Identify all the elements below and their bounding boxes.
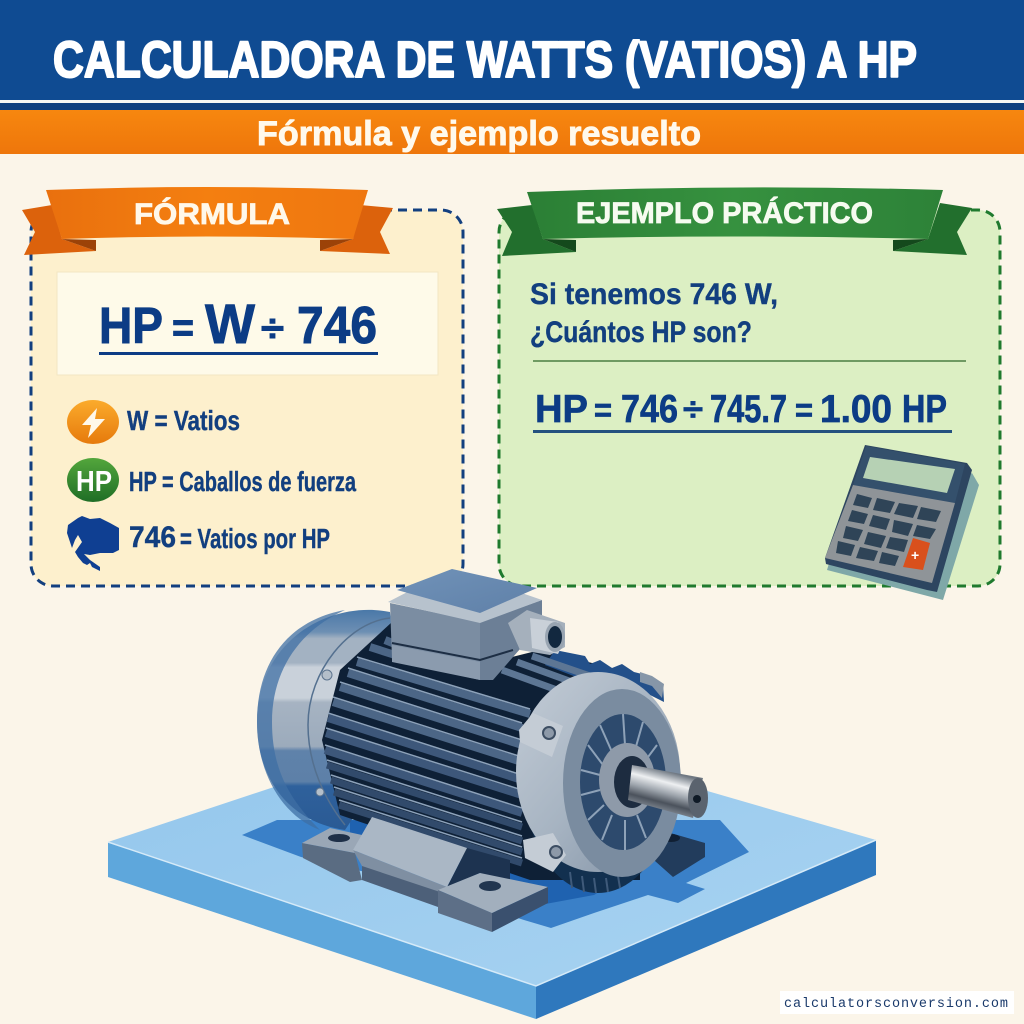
formula text: = <box>172 306 194 350</box>
calculation: = <box>795 392 813 428</box>
finned body <box>322 622 664 880</box>
calculation <box>533 388 952 433</box>
panel: worked example <box>497 187 1000 600</box>
calculation: = <box>594 392 612 428</box>
watermark <box>780 991 1014 1014</box>
ribbon: example heading <box>497 187 972 256</box>
cable gland <box>508 610 565 655</box>
label: HP: HP = Caballos de fuerza <box>129 466 356 497</box>
rear foot right <box>646 832 705 877</box>
label: 746: = Vatios por HP <box>180 523 330 554</box>
formula text: ÷ <box>261 308 284 350</box>
question text: ¿Cuántos HP son? <box>530 316 752 349</box>
formula text: W <box>205 292 255 355</box>
calculation: HP <box>535 388 588 431</box>
icon: HP badge: HP <box>76 466 112 498</box>
mounting ears <box>519 713 566 872</box>
terminal box <box>388 569 565 680</box>
legend: vatios por HP <box>67 516 330 571</box>
formula box <box>57 272 438 375</box>
watermark: calculatorsconversion.com <box>784 997 1008 1012</box>
label: W: W = Vatios <box>127 405 240 436</box>
output shaft <box>628 765 708 818</box>
label: 746: 746 <box>129 521 176 554</box>
icon: calculator <box>825 445 979 600</box>
blue platform <box>108 722 876 1019</box>
ribbon: formula heading <box>22 187 393 255</box>
rear fan cover <box>257 610 392 830</box>
icon: horse <box>67 516 119 571</box>
legend: caballos de fuerza <box>67 458 356 502</box>
icon: lightning bolt <box>67 400 119 444</box>
heading text: FÓRMULA <box>134 197 290 231</box>
subtitle: Fórmula y ejemplo resuelto <box>257 115 701 153</box>
label: 746 <box>129 521 330 554</box>
formula text: 746 <box>297 297 377 355</box>
calculation: 1.00 <box>820 388 892 431</box>
question text <box>530 278 778 349</box>
icon: HP badge <box>67 458 119 502</box>
calculation: ÷ <box>683 391 703 427</box>
calculation: 745.7 <box>710 388 787 431</box>
header band <box>0 0 1024 110</box>
formula text: HP <box>99 297 163 354</box>
heading text: EJEMPLO PRÁCTICO <box>576 196 873 230</box>
panel: formula <box>22 187 463 586</box>
calculation: HP <box>902 388 947 431</box>
front end shield <box>516 672 708 893</box>
icon: calculator: + <box>911 547 919 563</box>
question text: Si tenemos 746 W, <box>530 278 778 311</box>
base and feet <box>302 817 548 932</box>
legend: vatios <box>67 400 240 444</box>
electric motor <box>257 569 708 932</box>
calculation: 746 <box>621 388 678 431</box>
formula text <box>99 292 378 355</box>
subtitle band <box>0 110 1024 154</box>
